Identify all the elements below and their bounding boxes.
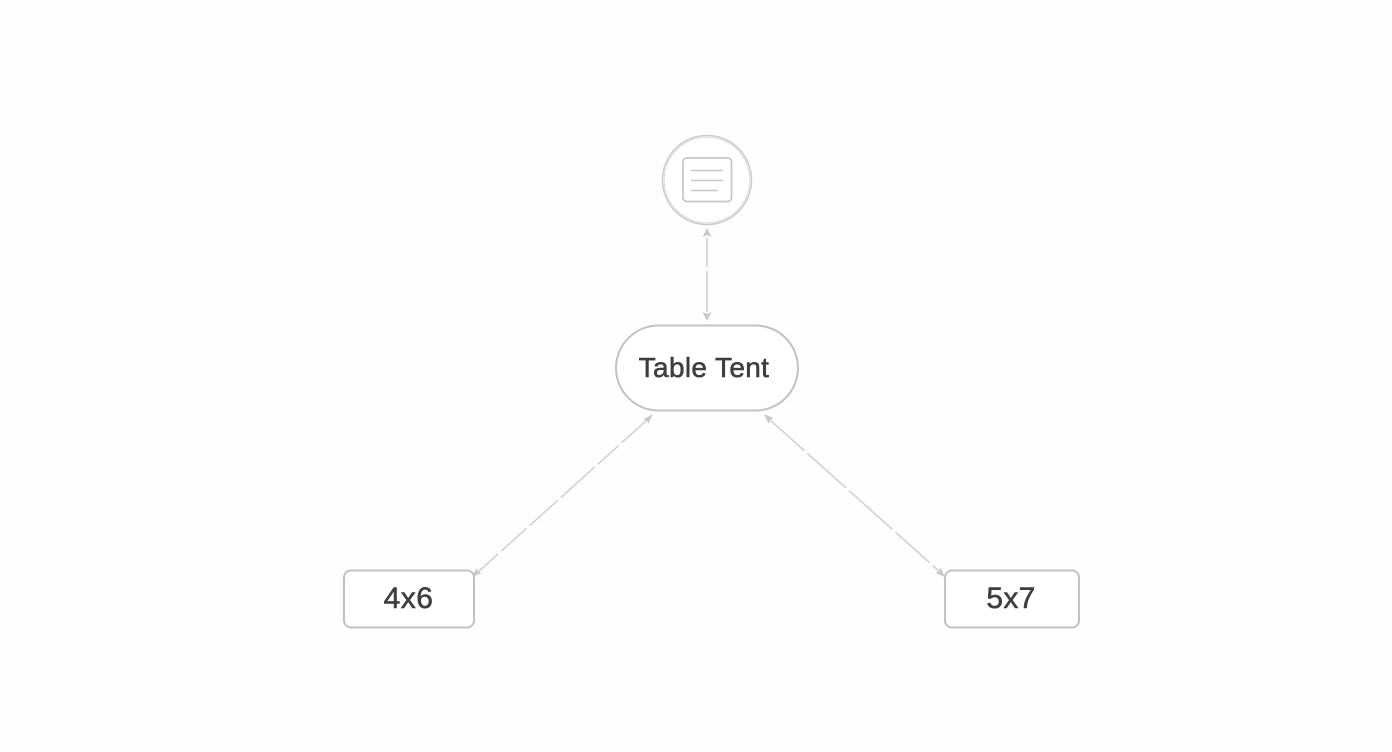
arrow: table tent to 4x6 bbox=[472, 414, 653, 577]
node: 4x6: 4x6 bbox=[384, 582, 433, 615]
node: 5x7 bbox=[945, 570, 1079, 628]
arrow: table tent to 5x7 bbox=[764, 414, 945, 577]
node: 4x6 bbox=[344, 570, 474, 628]
node: Table Tent: Table Tent bbox=[639, 352, 769, 383]
node: Table Tent bbox=[616, 326, 798, 410]
icon: document in circle bbox=[662, 136, 752, 224]
arrow: icon to table tent bbox=[702, 228, 712, 321]
node: 5x7: 5x7 bbox=[986, 582, 1036, 615]
